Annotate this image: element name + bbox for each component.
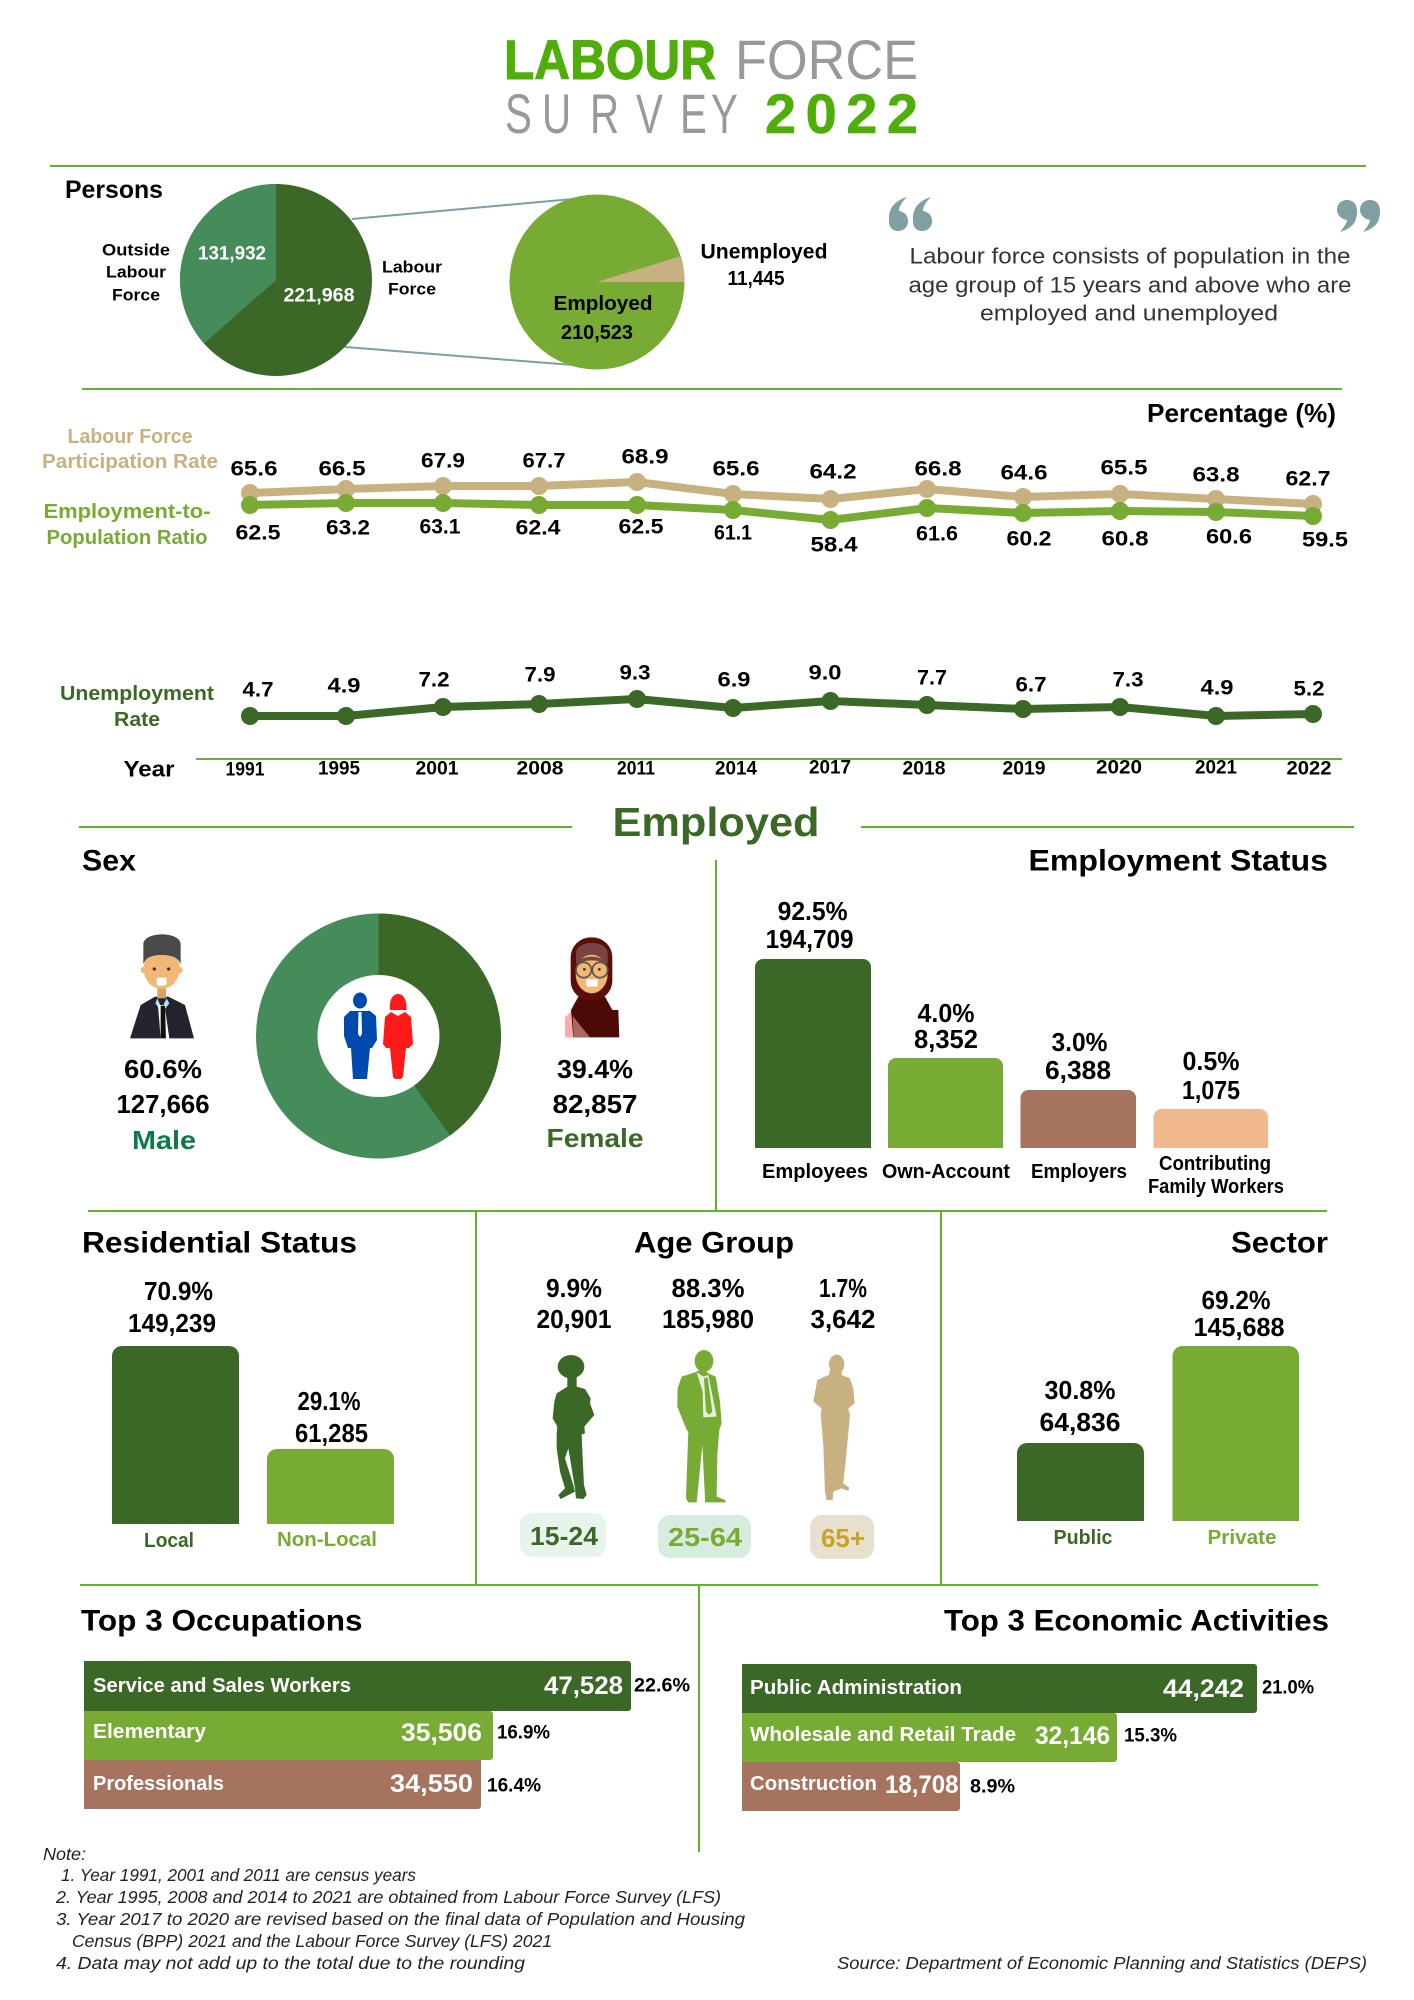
legend: unemployment rate: Unemployment bbox=[60, 683, 214, 705]
bar: service and sales workers: 22.6% bbox=[634, 1676, 690, 1696]
age values: 185,980 bbox=[662, 1304, 754, 1334]
notes: 2. Year 1995, 2008 and 2014 to 2021 are obtained from Labour Force Survey (LFS) bbox=[55, 1887, 721, 1907]
values: unemployment: 7.2 bbox=[418, 668, 450, 692]
legend: labour force participation rate bbox=[42, 426, 218, 473]
bar categories: Own-Account bbox=[882, 1161, 1010, 1183]
axis: years: 2017 bbox=[809, 758, 851, 778]
axis: years: 2022 bbox=[1286, 758, 1332, 780]
axis: years: 2019 bbox=[1002, 758, 1046, 780]
legend: employment to population ratio: Employment-to- bbox=[44, 501, 210, 523]
line: unemployment bbox=[241, 690, 1322, 725]
pie labels: Employed bbox=[554, 293, 652, 315]
bar categories: Employers bbox=[1031, 1161, 1127, 1183]
bar categories: Family Workers bbox=[1148, 1176, 1284, 1198]
bar: wholesale and retail trade: 32,146 bbox=[1035, 1722, 1110, 1750]
bar categories: Contributing bbox=[1159, 1153, 1271, 1175]
title: LABOUR bbox=[504, 28, 716, 91]
bar values: 149,239 bbox=[128, 1308, 216, 1338]
bar categories: Private bbox=[1208, 1527, 1276, 1549]
bar values: 92.5% bbox=[778, 896, 848, 926]
values: participation rate: 63.8 bbox=[1192, 464, 1240, 486]
values: unemployment: 4.7 bbox=[242, 678, 274, 702]
icon: adult silhouette bbox=[677, 1350, 726, 1502]
values: employment ratio: 62.5 bbox=[618, 516, 664, 538]
values: employment ratio: 63.2 bbox=[326, 516, 370, 540]
pie labels: 221,968 bbox=[284, 286, 354, 306]
legend: employment to population ratio bbox=[44, 501, 210, 549]
age values: 9.9% bbox=[546, 1273, 602, 1303]
panel: residential status bbox=[82, 1226, 394, 1552]
values: employment ratio: 63.1 bbox=[420, 516, 461, 538]
bar: public administration: 21.0% bbox=[1262, 1678, 1314, 1698]
pill: 25-64: 25-64 bbox=[668, 1522, 743, 1552]
bar: service and sales workers: Service and Sales Workers bbox=[93, 1675, 351, 1697]
pill: 65+: 65+ bbox=[821, 1523, 865, 1553]
axis: years bbox=[124, 756, 1332, 782]
axis: years: 1991 bbox=[226, 760, 265, 780]
heading: percentage: Percentage (%) bbox=[1147, 398, 1336, 428]
donut chart bbox=[256, 914, 501, 1158]
values: employment ratio: 61.1 bbox=[714, 522, 752, 544]
values: participation rate: 67.9 bbox=[421, 450, 465, 472]
pie labels: Outside bbox=[102, 240, 170, 260]
heading: employment status: Employment Status bbox=[1028, 844, 1328, 878]
bar: construction: Construction bbox=[750, 1773, 877, 1795]
bar values: 61,285 bbox=[295, 1418, 368, 1448]
icon: female avatar bbox=[565, 937, 619, 1037]
panel: definition quote bbox=[889, 197, 1380, 326]
heading: sex: Sex bbox=[82, 844, 136, 878]
values: unemployment: 4.9 bbox=[1200, 676, 1234, 700]
values: unemployment: 7.9 bbox=[524, 664, 556, 686]
values: unemployment bbox=[242, 662, 1324, 702]
legend: unemployment rate bbox=[60, 683, 214, 731]
bar categories: Non-Local bbox=[277, 1529, 377, 1551]
bar: professionals: 34,550 bbox=[390, 1770, 473, 1798]
panel: sector bbox=[1017, 1226, 1328, 1549]
values: employment ratio: 60.6 bbox=[1206, 526, 1252, 548]
bar categories: Local bbox=[144, 1530, 194, 1552]
stats: male: Male bbox=[132, 1125, 196, 1155]
values: participation rate: 66.8 bbox=[914, 458, 962, 480]
bar: elementary: 16.9% bbox=[497, 1722, 550, 1744]
stats: female: 82,857 bbox=[552, 1089, 638, 1119]
stats: male bbox=[116, 1054, 210, 1155]
values: employment ratio: 60.8 bbox=[1102, 528, 1149, 550]
pie labels: 11,445 bbox=[728, 268, 784, 290]
values: unemployment: 6.9 bbox=[718, 668, 750, 692]
bar: elementary bbox=[84, 1711, 550, 1760]
bar categories bbox=[1054, 1527, 1276, 1549]
pill: 25-64 bbox=[658, 1515, 751, 1558]
values: employment ratio: 61.6 bbox=[916, 522, 958, 546]
values: employment ratio: 58.4 bbox=[810, 534, 858, 556]
values: participation rate: 68.9 bbox=[622, 446, 668, 468]
bar categories bbox=[762, 1153, 1284, 1198]
notes: Census (BPP) 2021 and the Labour Force Survey (LFS) 2021 bbox=[72, 1931, 552, 1951]
pie labels bbox=[102, 240, 828, 344]
pill: 15-24: 15-24 bbox=[530, 1521, 599, 1551]
bar: elementary: 35,506 bbox=[401, 1719, 482, 1747]
bar: wholesale and retail trade: Wholesale and Retail Trade bbox=[750, 1724, 1016, 1746]
stats: female: Female bbox=[546, 1123, 644, 1153]
bar chart: sector bbox=[1017, 1346, 1299, 1521]
axis: years: 1995 bbox=[318, 758, 360, 780]
bar values: 194,709 bbox=[766, 924, 854, 954]
notes: 3. Year 2017 to 2020 are revised based on the final data of Population and Housing bbox=[56, 1909, 745, 1929]
values: participation rate: 65.6 bbox=[712, 458, 760, 480]
pill: 15-24 bbox=[520, 1513, 606, 1557]
values: employment ratio: 62.4 bbox=[516, 516, 561, 540]
bar values: 64,836 bbox=[1040, 1407, 1120, 1437]
age values: 88.3% bbox=[672, 1273, 744, 1303]
bar: construction: 18,708 bbox=[885, 1771, 959, 1799]
values: employment ratio: 59.5 bbox=[1302, 528, 1348, 552]
panel: sex bbox=[82, 844, 644, 1158]
heading: sector: Sector bbox=[1231, 1226, 1328, 1260]
connector lines bbox=[345, 199, 573, 365]
values: unemployment: 7.3 bbox=[1112, 668, 1144, 692]
bar values: 6,388 bbox=[1045, 1055, 1111, 1085]
values: unemployment: 9.0 bbox=[808, 662, 842, 684]
values: participation rate bbox=[230, 446, 1330, 490]
pie: labour force vs outside bbox=[180, 184, 372, 376]
quote text bbox=[908, 244, 1352, 326]
axis: years: 2008 bbox=[516, 758, 564, 780]
icon: youth silhouette bbox=[553, 1355, 594, 1499]
heading: age group: Age Group bbox=[634, 1226, 794, 1260]
source: Source: Department of Economic Planning and Statistics (DEPS) bbox=[837, 1953, 1367, 1973]
stats: male: 127,666 bbox=[116, 1089, 210, 1119]
age values bbox=[536, 1273, 876, 1334]
bar categories: Employees bbox=[762, 1161, 868, 1183]
bar: construction: 8.9% bbox=[970, 1776, 1015, 1798]
axis: years: 2020 bbox=[1096, 758, 1142, 778]
quote text: employed and unemployed bbox=[980, 300, 1278, 326]
pie labels: 210,523 bbox=[561, 322, 633, 344]
values: participation rate: 64.6 bbox=[1000, 462, 1048, 484]
bar: elementary: Elementary bbox=[93, 1721, 207, 1743]
bar: construction bbox=[742, 1762, 1015, 1811]
values: unemployment: 6.7 bbox=[1016, 674, 1046, 696]
bar values: 69.2% bbox=[1202, 1285, 1270, 1315]
bar: service and sales workers bbox=[84, 1661, 690, 1711]
notes: Note: bbox=[43, 1844, 86, 1864]
bar chart: employment status bbox=[755, 959, 1268, 1148]
heading: top 3 occupations: Top 3 Occupations bbox=[81, 1604, 362, 1638]
axis: years: 2014 bbox=[715, 758, 757, 780]
bar: public administration: Public Administration bbox=[750, 1677, 962, 1699]
bar values: 8,352 bbox=[914, 1024, 978, 1054]
values: participation rate: 66.5 bbox=[318, 458, 366, 480]
title bbox=[504, 28, 918, 146]
heading: employed: Employed bbox=[612, 799, 820, 845]
bar: wholesale and retail trade: 15.3% bbox=[1124, 1726, 1177, 1746]
age values: 20,901 bbox=[536, 1304, 612, 1334]
values: participation rate: 65.5 bbox=[1100, 456, 1148, 480]
stats: female: 39.4% bbox=[557, 1054, 633, 1084]
quote text: Labour force consists of population in the bbox=[910, 244, 1350, 268]
panel: employment status bbox=[755, 844, 1328, 1198]
bar: public administration bbox=[742, 1664, 1314, 1713]
age values: 1.7% bbox=[819, 1273, 867, 1303]
pie: employed vs unemployed bbox=[510, 194, 685, 370]
bar values: 1,075 bbox=[1182, 1075, 1240, 1105]
pie labels: 131,932 bbox=[198, 244, 266, 264]
values: unemployment: 9.3 bbox=[620, 662, 650, 684]
pie labels: Labour bbox=[106, 262, 166, 282]
pill: 65+ bbox=[810, 1515, 874, 1559]
chart: unemployment rate bbox=[60, 662, 1342, 782]
notes bbox=[43, 1844, 745, 1973]
bar: public administration: 44,242 bbox=[1163, 1675, 1244, 1703]
axis: years: 2018 bbox=[902, 758, 946, 780]
bar values: 30.8% bbox=[1044, 1375, 1116, 1405]
values: unemployment: 5.2 bbox=[1294, 678, 1324, 700]
legend: employment to population ratio: Population Ratio bbox=[46, 527, 208, 549]
panel: age group bbox=[520, 1226, 876, 1559]
line: participation rate bbox=[241, 473, 1322, 513]
values: unemployment: 7.7 bbox=[917, 666, 947, 690]
pie labels: Force bbox=[388, 280, 436, 298]
legend: unemployment rate: Rate bbox=[114, 709, 160, 731]
stats: female bbox=[546, 1054, 644, 1153]
bar: professionals: 16.4% bbox=[487, 1776, 541, 1796]
notes: 4. Data may not add up to the total due to the rounding bbox=[56, 1953, 525, 1973]
values: participation rate: 67.7 bbox=[522, 450, 566, 472]
legend: labour force participation rate: Participation Rate bbox=[42, 451, 218, 473]
bar values: 70.9% bbox=[144, 1276, 213, 1306]
panel: top 3 occupations bbox=[81, 1604, 690, 1809]
icon: opening quote bbox=[889, 197, 932, 231]
bar categories bbox=[144, 1529, 377, 1552]
bar values: 0.5% bbox=[1182, 1046, 1240, 1076]
values: participation rate: 65.6 bbox=[230, 458, 278, 480]
bar values bbox=[766, 896, 1240, 1105]
bar values bbox=[1040, 1285, 1284, 1437]
heading: residential status: Residential Status bbox=[82, 1226, 357, 1260]
axis: years: 2021 bbox=[1195, 758, 1237, 778]
bar chart: residential status bbox=[112, 1346, 394, 1524]
age values: 3,642 bbox=[810, 1304, 876, 1334]
axis: years: 2001 bbox=[416, 758, 459, 780]
axis: years: Year bbox=[124, 756, 175, 782]
heading: top 3 economic activities: Top 3 Economic Activities bbox=[944, 1604, 1329, 1638]
title: SURVEY bbox=[505, 84, 738, 146]
values: participation rate: 62.7 bbox=[1286, 468, 1330, 490]
bar values: 4.0% bbox=[918, 998, 974, 1028]
panel: persons pies bbox=[65, 176, 828, 376]
bar values: 3.0% bbox=[1052, 1027, 1108, 1057]
icon: closing quote bbox=[1337, 200, 1380, 232]
pie labels: Force bbox=[112, 286, 160, 304]
bar: professionals: Professionals bbox=[93, 1773, 224, 1795]
bar: wholesale and retail trade bbox=[742, 1713, 1177, 1762]
bar: professionals bbox=[84, 1760, 541, 1809]
values: participation rate: 64.2 bbox=[810, 460, 856, 484]
values: unemployment: 4.9 bbox=[328, 674, 360, 698]
stats: male: 60.6% bbox=[124, 1054, 202, 1084]
icon: senior silhouette bbox=[813, 1355, 855, 1500]
chart: participation and employment lines bbox=[42, 426, 1348, 556]
bar values bbox=[128, 1276, 368, 1448]
quote text: age group of 15 years and above who are bbox=[908, 272, 1352, 298]
values: employment ratio bbox=[236, 516, 1348, 556]
pie labels: Unemployed bbox=[700, 240, 828, 264]
values: employment ratio: 60.2 bbox=[1006, 528, 1052, 550]
icon: male avatar bbox=[130, 934, 194, 1038]
bar values: 29.1% bbox=[298, 1386, 360, 1416]
bar: service and sales workers: 47,528 bbox=[544, 1672, 623, 1700]
heading: persons: Persons bbox=[65, 176, 163, 204]
icon: man and woman pictogram bbox=[344, 992, 413, 1079]
legend: labour force participation rate: Labour Force bbox=[68, 426, 192, 448]
bar values: 145,688 bbox=[1194, 1312, 1284, 1342]
axis: years: 2011 bbox=[617, 758, 655, 780]
panel: top 3 economic activities bbox=[742, 1604, 1329, 1811]
title: 2022 bbox=[765, 82, 918, 145]
bar categories: Public bbox=[1054, 1527, 1112, 1549]
values: employment ratio: 62.5 bbox=[236, 522, 281, 544]
pie labels: Labour bbox=[382, 258, 442, 276]
title: FORCE bbox=[735, 28, 918, 91]
notes: 1. Year 1991, 2001 and 2011 are census years bbox=[61, 1865, 416, 1885]
line: employment ratio bbox=[241, 494, 1322, 529]
